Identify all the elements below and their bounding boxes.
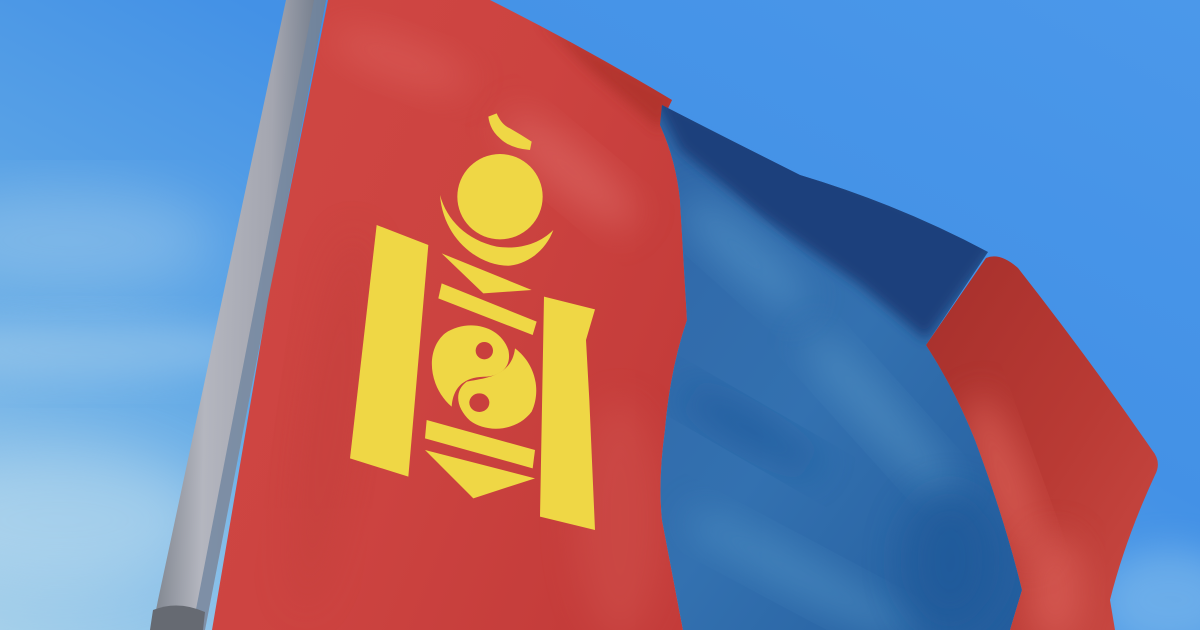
sun [457, 154, 543, 239]
yin yang lower dot [469, 393, 489, 412]
yin yang upper dot [476, 342, 493, 359]
upper bar [438, 283, 537, 335]
right red band [920, 250, 1165, 630]
icon: Soyombo emblem [350, 113, 595, 530]
yin yang right lobe [458, 348, 536, 429]
upper triangle [442, 253, 532, 293]
yin yang left lobe [432, 325, 509, 407]
crescent moon [440, 195, 553, 266]
lower bar [425, 420, 535, 468]
lower triangle [425, 450, 535, 498]
left pillar [350, 225, 428, 477]
flame [488, 113, 532, 150]
left red band [200, 0, 700, 630]
central blue band [660, 105, 1022, 630]
right pillar [540, 297, 595, 530]
flagpole [150, 0, 326, 630]
